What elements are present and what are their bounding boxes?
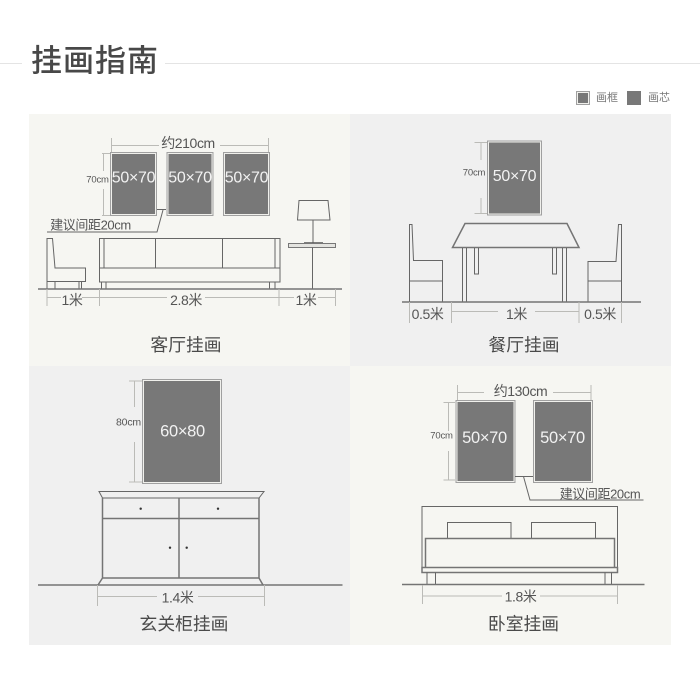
floor line bbox=[402, 301, 641, 303]
left chair bbox=[410, 224, 442, 302]
panel: living room bbox=[29, 114, 350, 366]
room dimensions: 1米 bbox=[62, 292, 83, 308]
paintings bbox=[456, 400, 592, 482]
paintings: 50×70 bbox=[168, 170, 212, 186]
height dimension: 70cm bbox=[86, 154, 110, 216]
title: 挂画指南 bbox=[31, 44, 159, 78]
lamp and side table bbox=[288, 200, 336, 289]
caption: 餐厅挂画 bbox=[488, 335, 560, 355]
room dimensions: 1米 bbox=[506, 306, 527, 322]
room dimensions: 2.8米 bbox=[170, 292, 202, 308]
bed dimension: 1.8米 bbox=[505, 588, 537, 604]
paintings: 50×70 bbox=[112, 170, 156, 186]
height dimension: 70cm bbox=[430, 402, 455, 480]
painting: 60×80 bbox=[160, 422, 205, 440]
caption: 卧室挂画 bbox=[488, 614, 559, 634]
room dimensions: 0.5米 bbox=[412, 306, 444, 322]
right chair bbox=[588, 224, 622, 302]
width dimension: 210cm: 约210cm bbox=[161, 135, 215, 151]
height dimension: 70cm bbox=[463, 142, 487, 214]
caption: 玄关柜挂画 bbox=[140, 614, 228, 634]
painting bbox=[142, 380, 222, 484]
panel: bedroom bbox=[350, 366, 671, 645]
paintings: 50×70 bbox=[225, 170, 269, 186]
bed bbox=[422, 506, 618, 584]
bed dimension bbox=[422, 585, 618, 604]
panel: entryway bbox=[29, 366, 350, 645]
paintings: 50×70 bbox=[540, 429, 585, 447]
paintings bbox=[110, 152, 270, 216]
callout: spacing 20cm: 建议间距20cm bbox=[50, 218, 131, 232]
armchair bbox=[47, 238, 86, 289]
width dimension: 130cm: 约130cm bbox=[494, 383, 547, 399]
height dimension: 70cm: 70cm bbox=[86, 174, 109, 186]
callout: spacing 20cm bbox=[515, 476, 644, 502]
width dimension: 210cm bbox=[112, 135, 268, 152]
room dimensions: 0.5米 bbox=[584, 306, 616, 322]
sofa bbox=[100, 238, 280, 289]
callout: spacing 20cm bbox=[47, 210, 166, 232]
legend bbox=[576, 90, 670, 105]
panel: dining room bbox=[350, 114, 671, 366]
floor line bbox=[38, 288, 342, 290]
room dimensions bbox=[47, 289, 336, 308]
painting: 50×70 bbox=[493, 168, 537, 185]
cabinet dimension bbox=[98, 585, 264, 606]
room dimensions: 1米 bbox=[296, 292, 317, 308]
entry cabinet bbox=[98, 492, 264, 585]
caption: 客厅挂画 bbox=[150, 335, 222, 355]
paintings: 50×70 bbox=[462, 429, 507, 447]
legend: 画框 bbox=[596, 91, 618, 104]
height dimension: 80cm: 80cm bbox=[116, 416, 141, 428]
floor line bbox=[402, 584, 644, 586]
width dimension: 130cm bbox=[458, 383, 591, 400]
dining table bbox=[452, 224, 579, 302]
height dimension: 80cm bbox=[116, 381, 142, 482]
floor line bbox=[38, 584, 342, 586]
height dimension: 70cm: 70cm bbox=[430, 430, 453, 442]
cabinet knobs bbox=[140, 508, 219, 549]
height dimension: 70cm: 70cm bbox=[463, 168, 485, 178]
cabinet dimension: 1.4米 bbox=[162, 590, 194, 606]
painting bbox=[488, 141, 542, 215]
room dimensions bbox=[410, 302, 622, 323]
legend: 画芯 bbox=[648, 90, 670, 104]
callout: spacing 20cm: 建议间距20cm bbox=[560, 486, 640, 502]
